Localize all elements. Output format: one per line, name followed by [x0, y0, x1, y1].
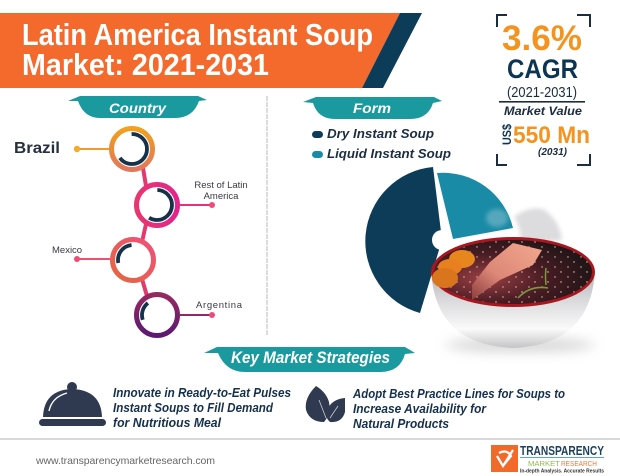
CAGR callout: CAGR — [507, 54, 578, 84]
heading: Form — [303, 97, 442, 119]
ring: Rest of Latin America — [136, 180, 248, 226]
header banner — [0, 13, 422, 88]
heading: Key Market Strategies: Key Market Strategies — [231, 349, 390, 367]
footer url: www.transparencymarketresearch.com — [35, 455, 215, 467]
title: Market: 2021-2031 — [22, 47, 269, 82]
icon: leaves — [306, 386, 345, 422]
CAGR callout: 3.6% — [502, 19, 582, 58]
CAGR callout: 550 Mn — [513, 122, 590, 149]
CAGR callout: (2031) — [538, 146, 567, 158]
ring: Argentina — [136, 294, 243, 336]
logo: RESEARCH — [561, 459, 597, 468]
ring: Brazil — [14, 128, 152, 170]
pie chart: form share — [365, 167, 513, 313]
legend: form: Liquid Instant Soup — [327, 147, 451, 161]
CAGR callout: Market Value — [504, 104, 582, 118]
text: strategy two: Natural Products — [353, 416, 449, 431]
connectors between rings — [142, 168, 147, 296]
logo: MARKET — [528, 459, 560, 468]
ring: Brazil: Brazil — [14, 140, 60, 157]
heading: Country — [68, 96, 207, 118]
CAGR callout: (2021-2031) — [507, 84, 577, 101]
text: strategy two: Increase Availability for — [353, 401, 487, 416]
ring: Argentina: Argentina — [196, 300, 243, 311]
text: strategy one: Innovate in Ready-to-Eat Pulses — [113, 385, 291, 400]
illustration: soup bowl — [431, 209, 595, 352]
ring: Rest of Latin America: America — [204, 191, 239, 202]
country ring chain — [14, 128, 248, 336]
legend: form — [312, 127, 451, 161]
ring: Mexico — [52, 240, 154, 280]
logo — [491, 443, 604, 474]
title: Latin America Instant Soup — [22, 17, 373, 52]
CAGR callout — [497, 15, 590, 165]
text: strategy two: Adopt Best Practice Lines for Soups to — [352, 386, 565, 401]
legend: form: Dry Instant Soup — [327, 127, 434, 141]
ring: Rest of Latin America: Rest of Latin — [194, 180, 248, 191]
heading: Form: Form — [353, 100, 391, 116]
panel divider — [266, 96, 268, 335]
heading: Country: Country — [109, 100, 167, 116]
text: strategy one: for Nutritious Meal — [113, 415, 221, 430]
ring: Mexico: Mexico — [52, 245, 82, 256]
logo: In-depth Analysis. Accurate Results — [520, 468, 604, 474]
text: strategy one: Instant Soups to Fill Demand — [113, 400, 274, 415]
CAGR callout: US$ — [500, 124, 514, 145]
icon: serving cloche — [39, 382, 106, 426]
steam — [514, 209, 562, 245]
footer rule — [0, 438, 620, 440]
heading: Key Market Strategies — [204, 347, 415, 372]
